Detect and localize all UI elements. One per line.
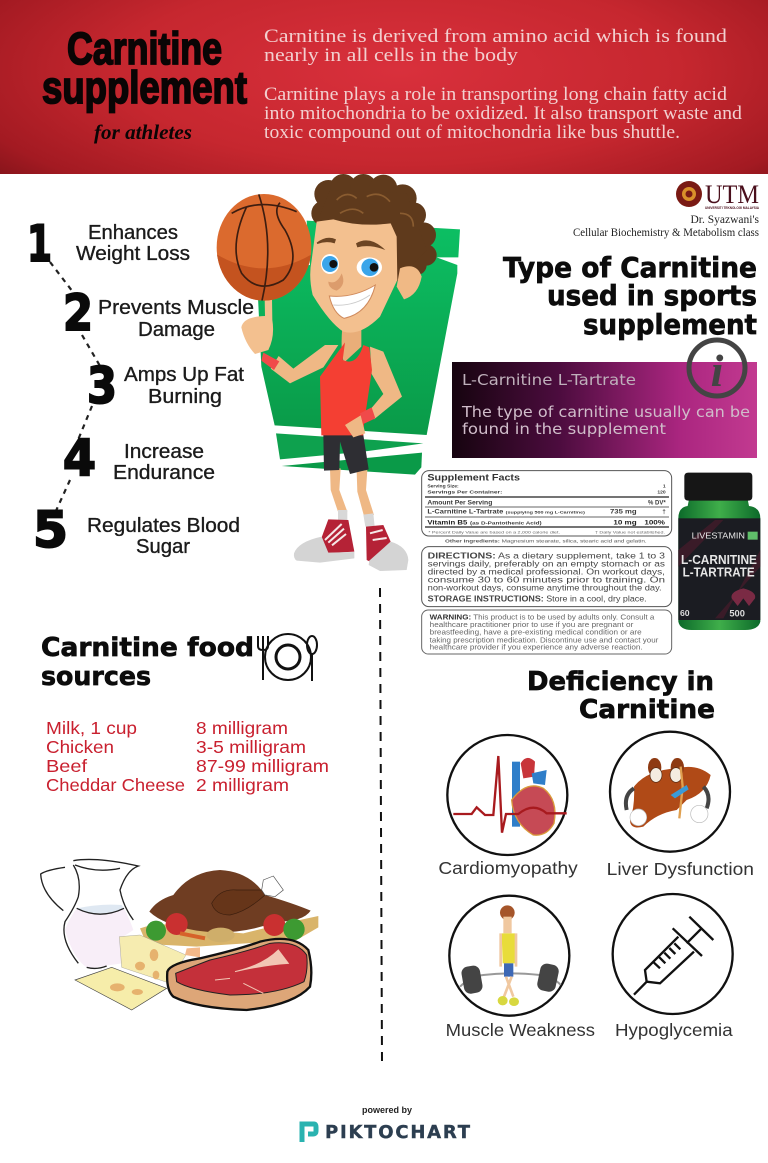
food table: 2 milligram bbox=[196, 775, 289, 795]
benefit 3: 3 bbox=[87, 357, 117, 415]
intro text: Carnitine plays a role in transporting long chain fatty acid bbox=[264, 84, 728, 105]
heading: type of carnitine: used in sports bbox=[547, 279, 757, 312]
UTM logo and credit: UTM bbox=[705, 180, 759, 209]
supplement bottle: LIVESTAMIN bbox=[692, 530, 745, 540]
warning box: healthcare provider if you experience any adverse reaction. bbox=[430, 645, 643, 652]
benefit 4: Endurance bbox=[113, 462, 215, 484]
eyes bbox=[321, 254, 382, 277]
facts table: (supplying 500 mg L-Carnitine) bbox=[506, 510, 586, 515]
benefit 2: 2 bbox=[63, 284, 93, 342]
heading: food sources: Carnitine food bbox=[41, 633, 254, 663]
benefit 1: 1 bbox=[27, 215, 52, 273]
heading: deficiency: Deficiency in bbox=[527, 667, 714, 697]
footer: piktochart bbox=[302, 1105, 471, 1143]
numbered benefits list bbox=[27, 215, 254, 559]
supplement facts label bbox=[422, 471, 760, 654]
facts table: Amount Per Serving bbox=[427, 500, 493, 506]
directions box: servings daily, preferably on an empty stomach or as bbox=[428, 559, 665, 569]
cheese wedges bbox=[75, 935, 200, 1010]
directions box bbox=[422, 547, 672, 607]
warning box: WARNING: This product is to be used by adults only. Consult a bbox=[430, 614, 654, 621]
benefit 3: Amps Up Fat bbox=[124, 364, 244, 386]
food table: Milk, 1 cup bbox=[46, 718, 137, 738]
footer: piktochart: PIKTOCHART bbox=[325, 1122, 471, 1143]
facts table: L-Carnitine L-Tartrate bbox=[427, 510, 504, 516]
footer: piktochart: powered by bbox=[362, 1105, 412, 1115]
facts table: † bbox=[662, 510, 666, 516]
benefit 1: Weight Loss bbox=[76, 243, 190, 265]
facts table: 120 bbox=[657, 490, 666, 496]
facts table: Serving Size: bbox=[427, 484, 459, 490]
intro text: Carnitine is derived from amino acid which is found bbox=[264, 26, 728, 47]
warning box: healthcare practitioner prior to use if you are pregnant or bbox=[430, 622, 634, 629]
supplement bottle: L-TARTRATE bbox=[683, 566, 755, 580]
benefit 5: Sugar bbox=[136, 536, 190, 558]
UTM logo and credit bbox=[573, 180, 760, 239]
food table: Chicken bbox=[46, 737, 114, 757]
supplement bottle: 500 bbox=[729, 609, 745, 619]
wrist and hand on hip bbox=[345, 407, 375, 437]
benefit 3: Burning bbox=[148, 386, 222, 408]
other ingredients: Other Ingredients: Magnesium stearate, silica, stearic acid and gelatin. bbox=[445, 538, 647, 543]
label: Cardiomyopathy bbox=[438, 858, 578, 878]
facts table: 10 mg bbox=[613, 519, 637, 526]
benefit 4: Increase bbox=[124, 441, 204, 463]
benefit 4: 4 bbox=[63, 429, 96, 487]
heading: type of carnitine: supplement bbox=[583, 308, 757, 341]
warning box: taking prescription medication. Discontinue use and contact your bbox=[430, 637, 659, 644]
info panel: The type of carnitine usually can be bbox=[461, 403, 750, 421]
facts table: 1 bbox=[663, 484, 666, 490]
directions box: non-workout days, consume anytime throughout the day. bbox=[428, 583, 662, 593]
neck bbox=[342, 320, 361, 363]
heading: deficiency bbox=[527, 667, 715, 725]
intro text bbox=[264, 26, 743, 143]
intro text: toxic compound out of mitochondria like bus shuttle. bbox=[264, 122, 680, 143]
label: Liver Dysfunction bbox=[607, 859, 754, 879]
muscle weakness bbox=[446, 896, 595, 1040]
food table: 87-99 milligram bbox=[196, 756, 329, 776]
title: Carnitine bbox=[67, 23, 222, 74]
illustration: food group bbox=[41, 859, 318, 1010]
heading: food sources bbox=[41, 633, 254, 692]
facts table: Vitamin B5 bbox=[427, 519, 468, 526]
supplement bottle: 60 bbox=[680, 608, 690, 618]
heading: deficiency: Carnitine bbox=[579, 695, 715, 725]
benefit 1: Enhances bbox=[88, 222, 178, 244]
title: supplement bbox=[42, 62, 247, 113]
facts table: 735 mg bbox=[610, 509, 637, 516]
brows bbox=[317, 238, 385, 250]
basketball bbox=[215, 194, 313, 303]
facts table: * Percent Daily Value are based on a 2,000 calorie diet. bbox=[428, 529, 560, 534]
illustration: basketball player bbox=[215, 174, 460, 571]
icon: piktochart mark bbox=[302, 1124, 316, 1142]
food table: 8 milligram bbox=[196, 718, 288, 738]
benefit 1 bbox=[27, 215, 190, 273]
UTM logo and credit: Dr. Syazwani's bbox=[690, 214, 760, 226]
hypoglycemia bbox=[613, 894, 733, 1040]
icon: plate and cutlery bbox=[258, 634, 317, 681]
facts table: % DV* bbox=[648, 500, 666, 506]
benefit 2: Damage bbox=[138, 319, 215, 341]
food table: 3-5 milligram bbox=[196, 737, 306, 757]
facts table: Supplement Facts bbox=[427, 473, 520, 483]
label: Hypoglycemia bbox=[615, 1020, 733, 1040]
info panel: found in the supplement bbox=[462, 420, 666, 438]
center dashed divider bbox=[380, 588, 382, 1062]
directions box: consume 30 to 60 minutes prior to training. On bbox=[428, 575, 666, 585]
liver dysfunction bbox=[607, 732, 754, 879]
facts table: † Daily Value not established. bbox=[595, 529, 665, 534]
title: for athletes bbox=[94, 120, 192, 144]
steak bbox=[167, 939, 311, 1010]
benefit 2: Prevents Muscle bbox=[98, 297, 254, 319]
label: Muscle Weakness bbox=[446, 1020, 595, 1040]
info panel bbox=[452, 340, 757, 458]
legs bbox=[330, 468, 375, 527]
directions box: DIRECTIONS: As a dietary supplement, take 1 to 3 bbox=[428, 550, 665, 560]
hair bbox=[311, 174, 437, 283]
directions box: STORAGE INSTRUCTIONS: Store in a cool, dry place. bbox=[428, 595, 647, 604]
milk jug bbox=[41, 859, 138, 968]
deficiency icons bbox=[438, 732, 754, 1040]
benefit 2 bbox=[63, 284, 254, 342]
directions box: directed by a medical professional. On workout days, bbox=[428, 567, 665, 577]
header banner bbox=[0, 0, 768, 174]
other arm bbox=[369, 347, 402, 419]
facts table bbox=[422, 471, 672, 536]
heading: type of carnitine: Type of Carnitine bbox=[503, 251, 757, 284]
food table: Beef bbox=[46, 756, 87, 776]
warning box: breastfeeding, have a pre-existing medical condition or are bbox=[430, 630, 642, 637]
supplement bottle bbox=[678, 473, 760, 630]
icon: info: i bbox=[711, 345, 724, 396]
benefit 5: Regulates Blood bbox=[87, 515, 240, 537]
facts table: 100% bbox=[644, 519, 665, 526]
info panel: L-Carnitine L-Tartrate bbox=[462, 371, 636, 389]
shorts bbox=[323, 435, 369, 474]
heading: food sources: sources bbox=[41, 662, 151, 692]
tank top bbox=[320, 342, 372, 435]
raised arm bbox=[241, 298, 338, 383]
benefit 5 bbox=[33, 501, 240, 559]
supplement bottle: L-CARNITINE bbox=[681, 553, 757, 567]
benefit 5: 5 bbox=[33, 501, 68, 559]
green backdrop bbox=[257, 221, 460, 475]
UTM logo and credit: Cellular Biochemistry & Metabolism class bbox=[573, 227, 759, 239]
cardiomyopathy bbox=[438, 735, 578, 878]
benefit 4 bbox=[63, 429, 215, 487]
heading: type of carnitine bbox=[503, 251, 757, 341]
intro text: nearly in all cells in the body bbox=[264, 45, 519, 66]
facts table: (as D-Pantothenic Acid) bbox=[470, 520, 542, 525]
roast turkey bbox=[140, 870, 318, 947]
intro text: into mitochondria to be oxidized. It also transport waste and bbox=[264, 103, 743, 124]
nose bbox=[328, 273, 343, 291]
head bbox=[310, 219, 422, 333]
icon: info bbox=[689, 340, 745, 396]
facts table: Servings Per Container: bbox=[427, 490, 503, 496]
food table bbox=[46, 718, 329, 795]
benefit 3 bbox=[87, 357, 244, 415]
smile bbox=[329, 285, 375, 318]
food table: Cheddar Cheese bbox=[46, 775, 185, 795]
warning box bbox=[422, 610, 672, 654]
title bbox=[42, 23, 247, 144]
sneakers bbox=[294, 519, 408, 571]
